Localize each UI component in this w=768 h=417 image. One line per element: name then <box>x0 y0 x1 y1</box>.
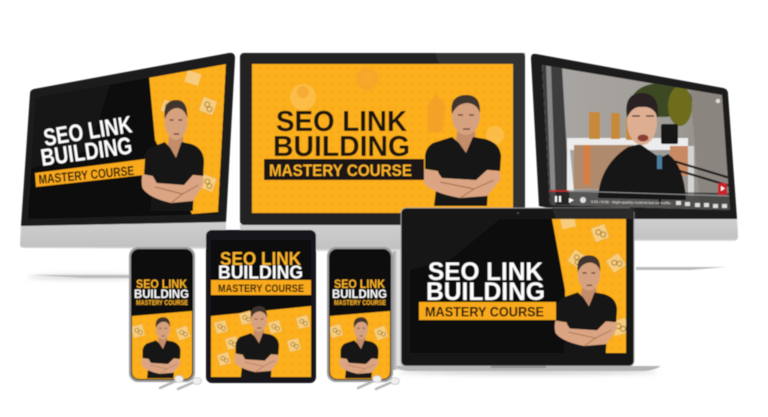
presenter <box>555 255 617 353</box>
stand bases <box>27 248 726 370</box>
phone body <box>327 247 393 382</box>
phone title: BUILDING <box>134 287 189 301</box>
microphone arm <box>660 157 730 205</box>
phone body <box>129 247 195 382</box>
left monitor title <box>35 111 145 187</box>
phone title <box>332 277 387 307</box>
laptop shadow <box>398 370 658 374</box>
laptop title: SEO LINK <box>428 258 543 286</box>
host <box>598 93 686 200</box>
presenter <box>142 100 204 211</box>
laptop <box>395 208 661 374</box>
phone title: BUILDING <box>332 287 387 301</box>
tablet title: BUILDING <box>218 262 303 282</box>
center monitor screen <box>252 64 513 213</box>
center monitor <box>240 53 525 251</box>
phone screen <box>131 279 193 380</box>
laptop title <box>419 258 556 320</box>
tablet <box>206 230 316 383</box>
left monitor frame <box>21 53 235 226</box>
phone title: MASTERY COURSE <box>334 300 386 307</box>
yellow panel <box>552 219 626 353</box>
laptop title: BUILDING <box>426 278 545 306</box>
laptop screen <box>410 216 630 353</box>
tablet title <box>211 249 311 295</box>
laptop lid <box>401 208 634 366</box>
plant <box>632 83 692 117</box>
left monitor <box>20 53 235 249</box>
right monitor frame <box>531 54 737 219</box>
laptop title: MASTERY COURSE <box>425 304 544 320</box>
right phone <box>327 247 393 382</box>
left monitor chin <box>20 221 226 249</box>
center monitor frame <box>240 53 525 225</box>
center monitor chin <box>240 224 525 251</box>
phone title: SEO LINK <box>334 277 385 291</box>
tablet screen <box>211 240 311 377</box>
left monitor title: BUILDING <box>39 132 134 172</box>
presenter <box>423 95 501 206</box>
center monitor title: SEO LINK <box>276 106 407 138</box>
player bar <box>550 190 730 210</box>
laptop base <box>395 366 661 371</box>
yellow panel <box>149 64 226 214</box>
right monitor chin <box>600 218 738 241</box>
shelves <box>567 138 688 192</box>
phone title: MASTERY COURSE <box>136 300 188 307</box>
left monitor title: SEO LINK <box>42 111 134 152</box>
phone title: SEO LINK <box>136 277 187 291</box>
center monitor title: BUILDING <box>273 131 410 163</box>
right monitor <box>531 54 738 241</box>
earbuds left <box>160 376 202 389</box>
center monitor title: MASTERY COURSE <box>269 161 412 180</box>
center monitor title <box>264 106 424 180</box>
left phone <box>129 247 195 382</box>
earbuds right <box>358 376 400 389</box>
tablet body <box>206 230 316 383</box>
phone screen <box>329 279 391 380</box>
tablet title: SEO LINK <box>220 249 301 269</box>
right monitor video <box>540 60 735 215</box>
right monitor video: 0:51 / 8:56 · High-quality content but no traffic <box>591 200 671 205</box>
phone title <box>134 277 189 307</box>
tablet title: MASTERY COURSE <box>218 283 304 295</box>
left monitor screen <box>28 63 227 218</box>
left monitor title: MASTERY COURSE <box>38 163 135 187</box>
